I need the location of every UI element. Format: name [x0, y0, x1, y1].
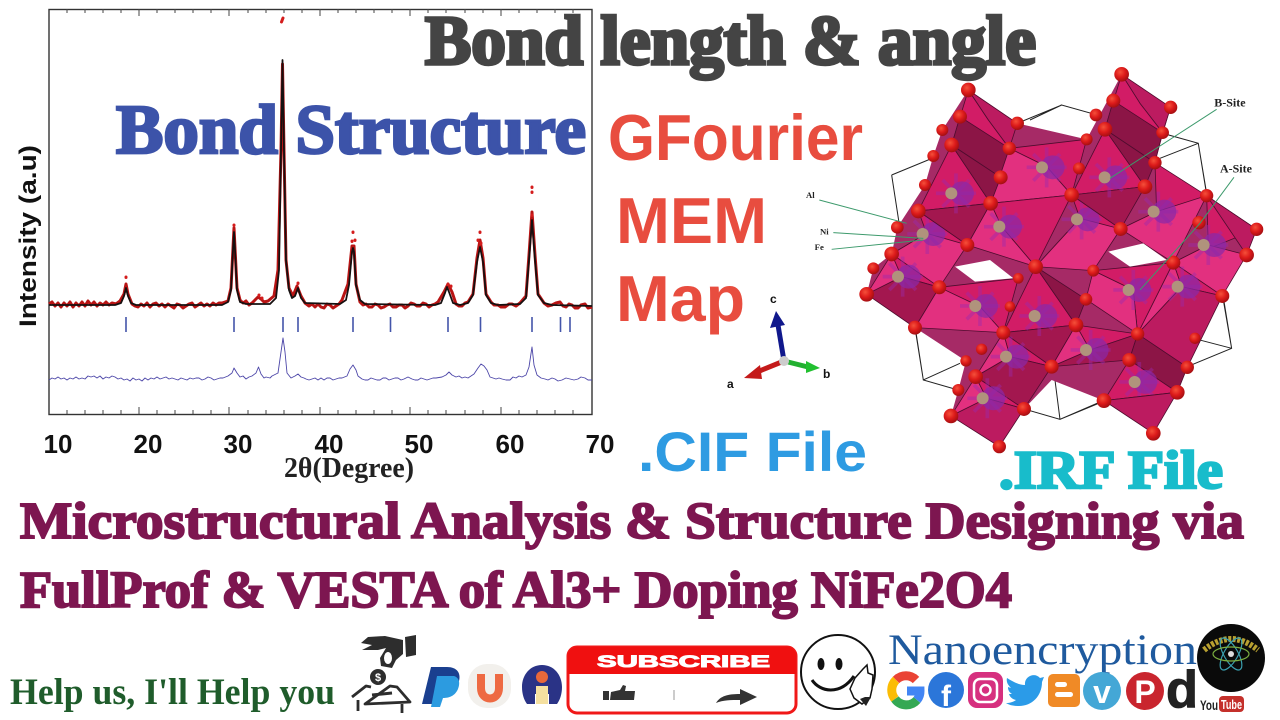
brand name: Nanoencryption: Nanoencryption: [888, 627, 1197, 674]
icon: donation hand and box: [352, 635, 416, 713]
site leader lines: [819, 109, 1234, 290]
atom and site labels: Ni: [820, 227, 829, 237]
observed data (red): [49, 64, 592, 308]
main title line 1: Microstructural Analysis & Structure Designing via: [20, 493, 1244, 550]
YouTube logo: You: [1200, 697, 1218, 713]
oxygen atoms: [859, 67, 1263, 453]
crystal structure illustration: [806, 67, 1263, 453]
label: MEM: MEM: [616, 184, 767, 257]
icon: crystal axes triad: [727, 292, 830, 391]
x-axis title: 2θ(Degree): [284, 453, 414, 484]
calculated fit (black): [49, 60, 592, 306]
plot frame: [49, 10, 592, 414]
icon: smiley with thumb: [801, 635, 875, 709]
heading: Bond length & angle: Bond length & angle: [425, 3, 1036, 80]
difference curve (blue): [49, 338, 592, 381]
label: GFourier: GFourier: [608, 101, 863, 174]
icon: crystal axes triad: c: [770, 292, 777, 306]
front octahedra: [918, 145, 1001, 245]
icon: donation hand and box: $: [375, 672, 381, 684]
x-axis tick labels: 40: [315, 429, 343, 459]
XRD Rietveld chart: [15, 9, 614, 484]
icon: Vimeo: v: [1093, 674, 1111, 710]
channel logo: [1197, 624, 1265, 692]
icon: share arrow: [716, 689, 757, 705]
x-axis tick labels: 50: [405, 429, 433, 459]
main title line 2: FullProf & VESTA of Al3+ Doping NiFe2O4: [20, 562, 1012, 619]
subscribe label: SUBSCRIBE: [597, 652, 770, 671]
icon: PayPal: [422, 667, 460, 707]
atom and site labels: Al: [806, 190, 815, 200]
icon: thumb: [603, 685, 635, 700]
back row octahedra: [952, 90, 1017, 177]
label: .IRF File: .IRF File: [999, 440, 1223, 500]
icon: Vimeo: [1083, 672, 1121, 710]
atom and site labels: Fe: [815, 242, 824, 252]
icon: crystal axes triad: b: [823, 367, 830, 381]
icon: U app: [468, 664, 511, 708]
atom and site labels: [806, 96, 1253, 252]
left octahedra: [892, 211, 967, 287]
atom and site labels: B-Site: [1214, 96, 1246, 110]
Bragg position ticks: [126, 317, 570, 332]
icon: Instagram: [968, 672, 1003, 708]
heading: Bond Structure: Bond Structure: [116, 92, 586, 169]
icon: Pinterest: P: [1134, 674, 1156, 710]
subscribe button: [568, 647, 796, 713]
unit cell wireframe: [892, 105, 1232, 419]
icon: Google: [892, 676, 920, 705]
white voids: [955, 243, 1167, 282]
octahedra: [867, 74, 1257, 447]
social icons row: [892, 661, 1198, 719]
icon: Twitter: [1006, 675, 1044, 706]
x-axis tick labels: [44, 429, 614, 459]
x-axis tick labels: 10: [44, 429, 72, 459]
observed outlier points: [126, 18, 532, 298]
label: Map: Map: [616, 262, 745, 335]
icon: crystal axes triad: a: [727, 377, 734, 391]
icon: person app: [522, 665, 562, 704]
icon: Pinterest: [1126, 672, 1164, 710]
footer: help text: Help us, I'll Help you: [10, 672, 335, 713]
subscribe banner: [568, 647, 796, 674]
icon: Blogger: [1048, 674, 1080, 707]
atom and site labels: A-Site: [1220, 162, 1253, 176]
icon: Dailymotion: d: [1166, 661, 1198, 719]
icon: Facebook: f: [941, 680, 952, 713]
icon: Facebook: [928, 672, 964, 713]
polyhedra base: [867, 74, 1257, 447]
x-axis tick labels: 60: [496, 429, 524, 459]
x-axis tick labels: 20: [134, 429, 162, 459]
YouTube logo: [1200, 696, 1244, 713]
x-axis tick labels: 70: [586, 429, 614, 459]
x-axis tick labels: 30: [224, 429, 252, 459]
y-axis title: Intensity (a.u): [15, 145, 42, 327]
label: .CIF File: .CIF File: [638, 420, 867, 483]
YouTube logo: Tube: [1221, 697, 1242, 712]
